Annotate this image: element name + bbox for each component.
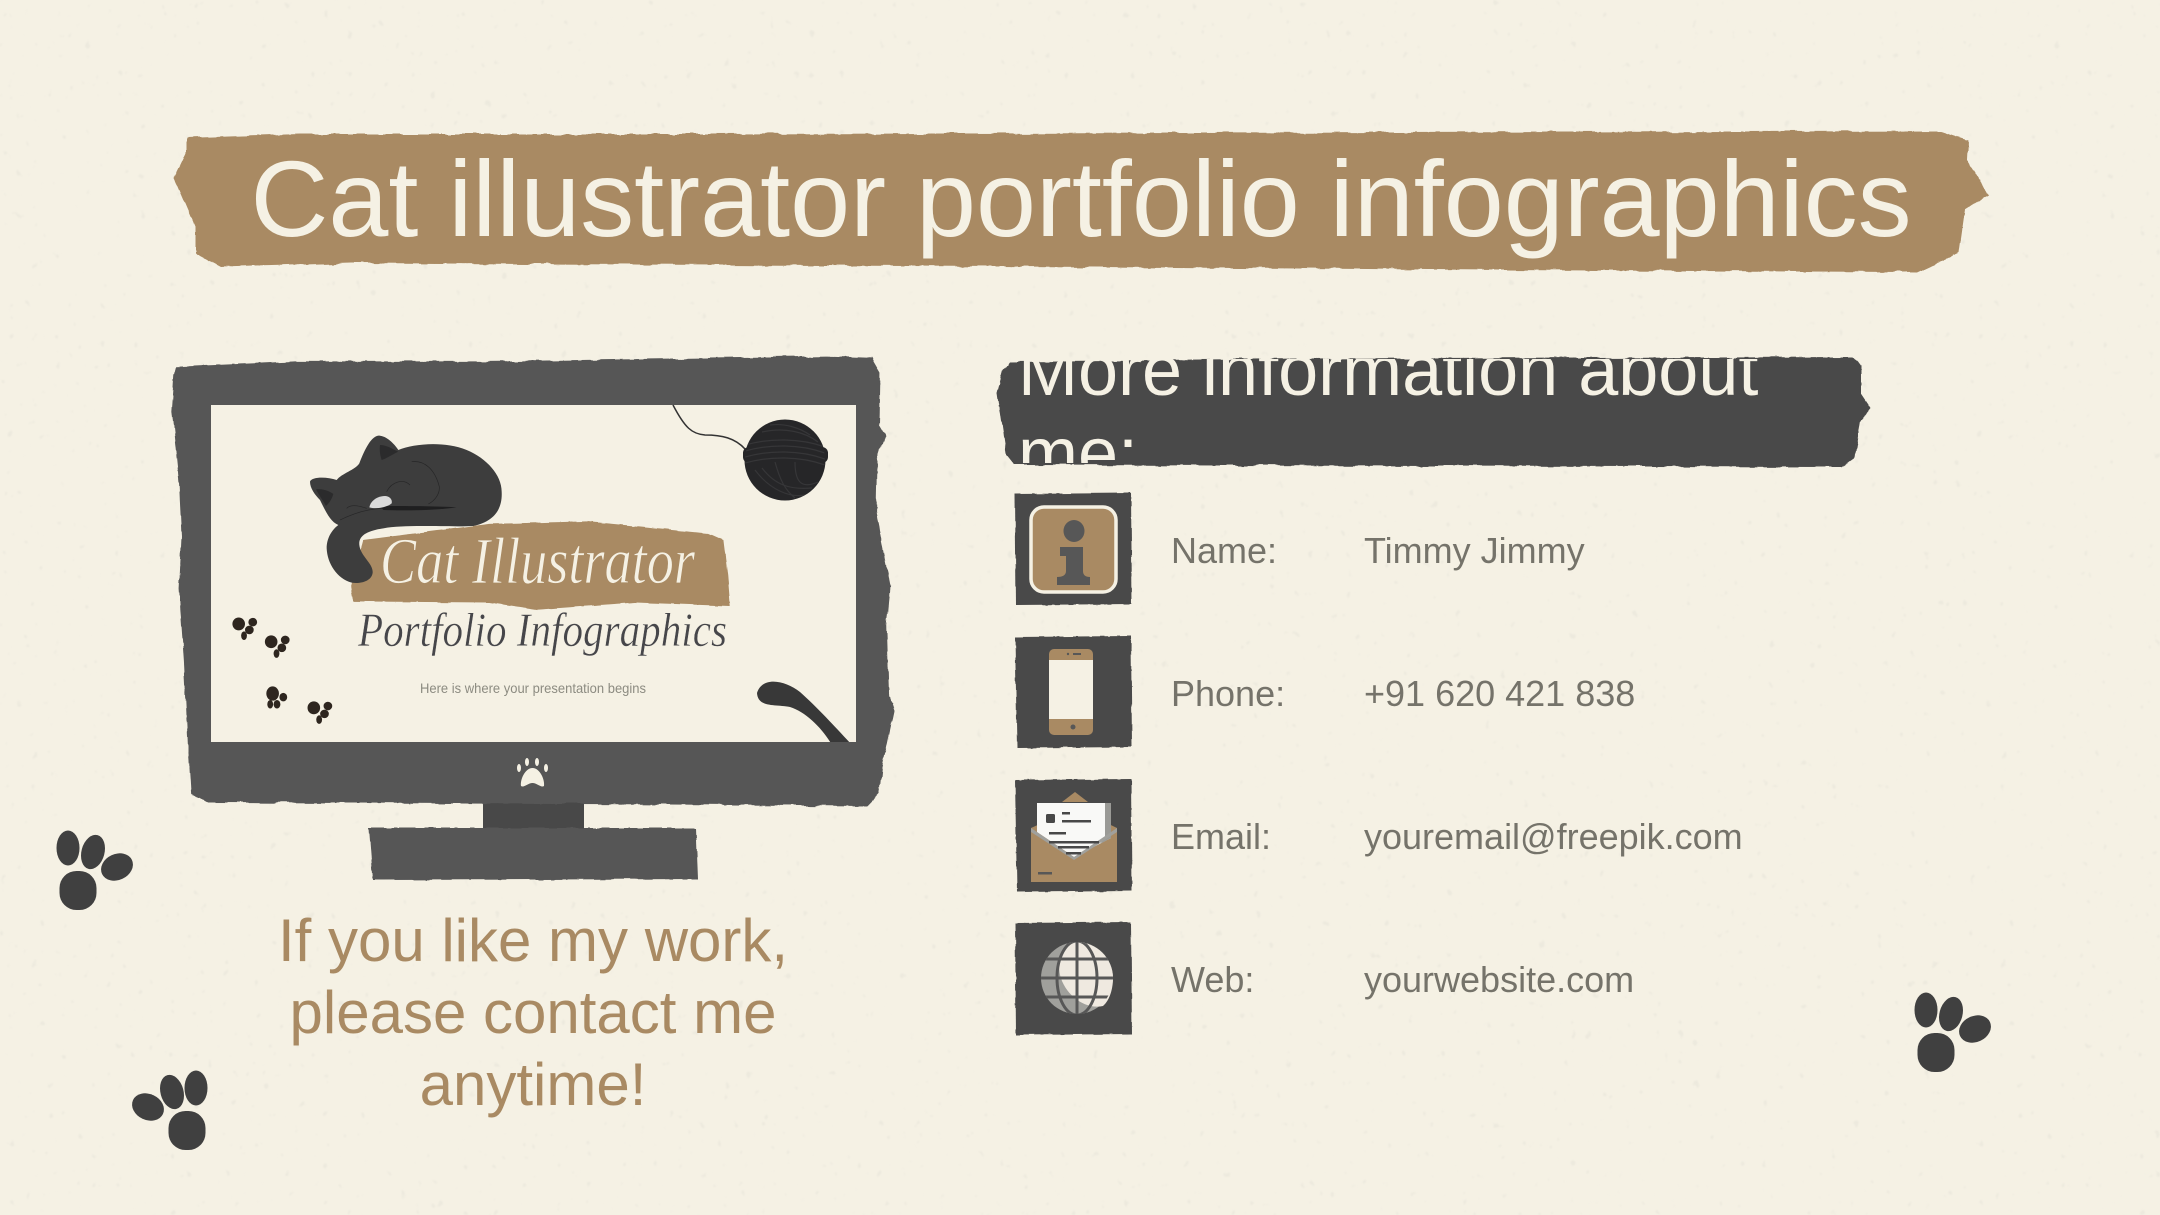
screen: small paw prints [232,617,332,724]
contact call to action: If you like my work, [278,907,788,974]
screen: yarn string [673,405,745,449]
row: email [1015,779,1743,892]
screen: sleeping black cat [310,436,502,583]
screen: brush banner [351,521,730,610]
monitor stand neck [483,800,584,830]
row: phone: Phone: [1171,673,1285,714]
row: web: yourwebsite.com [1364,959,1634,1000]
icon: info [1015,493,1132,605]
illustration: computer monitor [172,356,894,880]
heading: more information: me: [1018,414,1138,494]
monitor stand base [369,828,698,880]
contact call to action [278,907,788,1118]
row: phone: +91 620 421 838 [1364,673,1635,714]
screen: tagline: Here is where your presentation begins [420,680,646,696]
row: email: Email: [1171,816,1271,857]
monitor body [172,356,894,806]
icon: envelope [1015,779,1132,892]
contact call to action: please contact me [290,979,776,1046]
row: web: Web: [1171,959,1254,1000]
icon: paw print right [1914,992,1995,1072]
screen: title Cat Illustrator: Cat Illustrator [380,525,695,598]
icon: paw print bottom left [128,1070,208,1150]
heading: more information [996,356,1870,468]
screen: subtitle Portfolio Infographics: Portfolio Infographics [357,604,727,657]
monitor screen [211,405,856,742]
row: name: Timmy Jimmy [1364,530,1585,571]
row: web [1015,922,1634,1035]
icon: paw print left [56,830,137,910]
screen: tail [757,682,852,745]
row: name: Name: [1171,530,1277,571]
icon: white paw logo [517,758,548,786]
screen: yarn ball [743,420,828,500]
row: phone [1015,636,1635,748]
icon: globe [1015,922,1132,1035]
row: email: youremail@freepik.com [1364,816,1743,857]
heading: more information: More information about [1018,331,1758,411]
contact call to action: anytime! [420,1051,646,1118]
icon: phone [1015,636,1132,748]
title: Cat illustrator portfolio infographics [250,138,1912,259]
row: name [1015,493,1585,605]
